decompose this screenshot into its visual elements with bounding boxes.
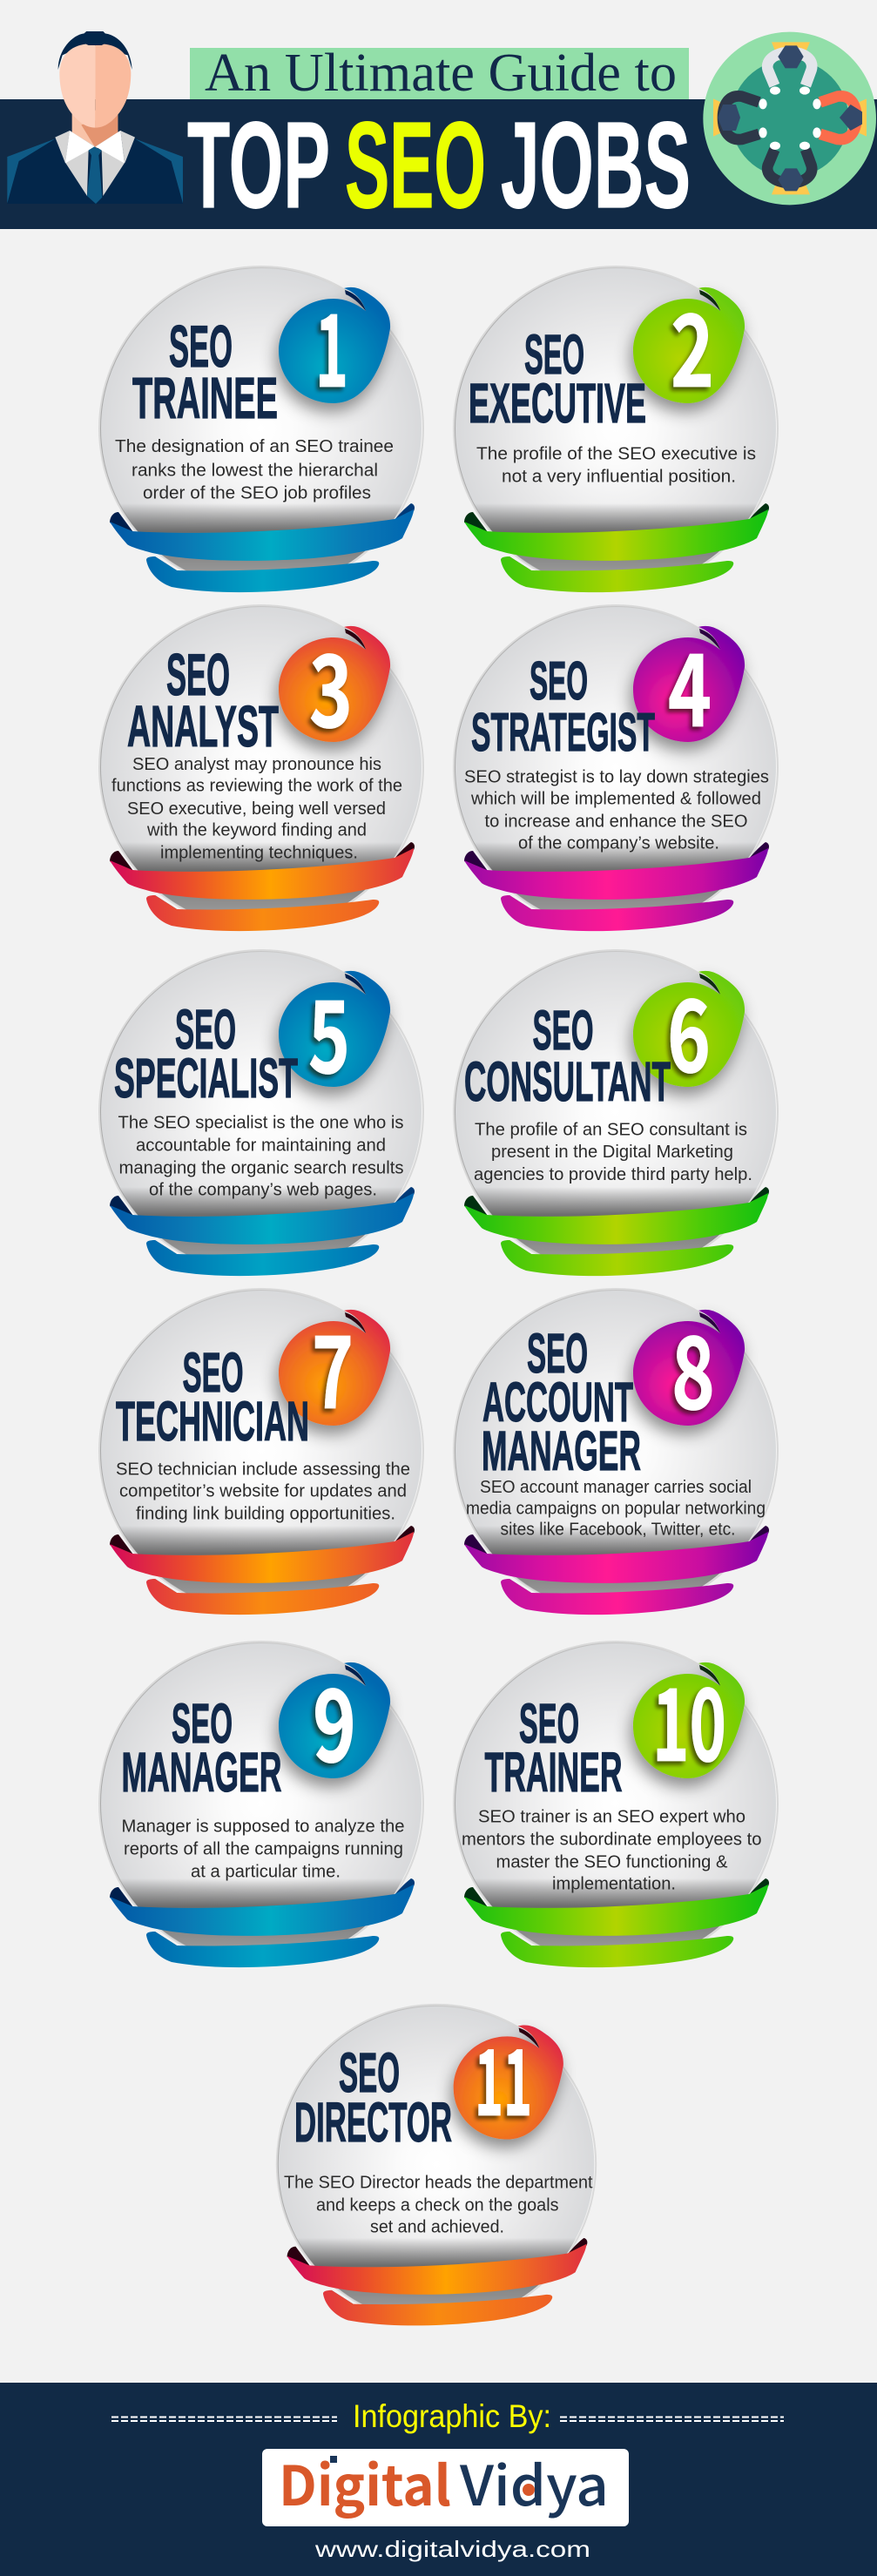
heading: ANALYST xyxy=(127,694,279,759)
panel: SEO Manager xyxy=(98,1641,424,1967)
heading xyxy=(116,1341,309,1453)
description: managing the organic search results xyxy=(118,1158,404,1177)
sphere and ribbon xyxy=(276,2004,597,2325)
description: ranks the lowest the hierarchal xyxy=(132,460,378,481)
heading xyxy=(132,314,278,431)
description xyxy=(284,2172,593,2236)
panel: SEO Specialist xyxy=(98,949,424,1276)
heading xyxy=(127,642,279,759)
description xyxy=(118,1113,404,1200)
description: which will be implemented & followed xyxy=(470,789,761,808)
description: functions as reviewing the work of the xyxy=(111,775,402,796)
number: 4 xyxy=(668,611,712,756)
heading: ACCOUNT xyxy=(482,1371,633,1433)
description: The profile of an SEO consultant is xyxy=(475,1120,747,1139)
description: agencies to provide third party help. xyxy=(474,1164,752,1184)
panel: SEO Consultant xyxy=(453,949,779,1276)
sphere and ribbon xyxy=(98,266,424,592)
description xyxy=(122,1817,404,1881)
sphere and ribbon xyxy=(98,604,424,931)
footer band xyxy=(0,2383,877,2576)
sphere and ribbon xyxy=(98,1288,424,1615)
heading xyxy=(114,998,298,1109)
description: order of the SEO job profiles xyxy=(143,482,371,503)
heading xyxy=(294,2041,452,2154)
logo: Digital Vidya: Vidya xyxy=(459,2443,609,2522)
description: SEO executive, being well versed xyxy=(127,799,386,819)
heading: STRATEGIST xyxy=(471,703,655,763)
heading xyxy=(484,1692,622,1804)
description: SEO analyst may pronounce his xyxy=(132,754,381,774)
number: 2 xyxy=(671,272,714,416)
logo: Digital Vidya: Digital xyxy=(279,2443,451,2522)
website url: www.digitalvidya.com xyxy=(314,2536,590,2562)
description: Manager is supposed to analyze the xyxy=(122,1817,404,1836)
description: set and achieved. xyxy=(370,2217,504,2236)
footer heading: Infographic By: Infographic By: xyxy=(353,2398,551,2434)
heading: SEO xyxy=(524,323,584,386)
sphere and ribbon xyxy=(453,604,779,931)
heading: DIRECTOR xyxy=(294,2091,452,2154)
heading: SEO xyxy=(339,2041,400,2104)
heading: SEO xyxy=(519,1692,579,1755)
heading xyxy=(464,999,671,1113)
heading: SEO xyxy=(166,642,230,708)
description: sites like Facebook, Twitter, etc. xyxy=(500,1519,735,1540)
main title: TOP SEO JOBS: JOBS xyxy=(501,96,691,233)
heading: TECHNICIAN xyxy=(116,1390,309,1453)
panel: SEO Trainee xyxy=(98,266,424,592)
description: media campaigns on popular networking xyxy=(466,1498,766,1519)
heading xyxy=(122,1692,282,1804)
heading xyxy=(471,651,655,763)
description xyxy=(115,436,394,503)
heading: SEO xyxy=(530,651,588,711)
sphere and ribbon xyxy=(98,1641,424,1967)
description: The profile of the SEO executive is xyxy=(476,444,756,463)
heading: CONSULTANT xyxy=(464,1050,671,1113)
description: SEO technician include assessing the xyxy=(116,1460,410,1479)
description xyxy=(476,444,756,486)
description: at a particular time. xyxy=(191,1862,341,1881)
heading: TRAINER xyxy=(484,1741,622,1804)
description: competitor’s website for updates and xyxy=(119,1480,407,1501)
icon: businessman xyxy=(7,31,183,204)
description: implementing techniques. xyxy=(160,843,358,862)
number: 1 xyxy=(315,272,348,416)
description: with the keyword finding and xyxy=(146,820,367,840)
footer dashes xyxy=(111,2418,784,2421)
title strip: An Ultimate Guide to: An Ultimate Guide to xyxy=(205,44,677,103)
panel: SEO Analyst xyxy=(98,604,424,931)
description: SEO trainer is an SEO expert who xyxy=(478,1806,745,1827)
heading: SPECIALIST xyxy=(114,1047,298,1109)
heading xyxy=(482,1322,641,1482)
description: of the company’s web pages. xyxy=(149,1179,377,1200)
number: 10 xyxy=(652,1646,726,1790)
description: SEO account manager carries social xyxy=(480,1477,752,1497)
number: 6 xyxy=(667,957,711,1102)
description: The designation of an SEO trainee xyxy=(115,436,394,456)
description: mentors the subordinate employees to xyxy=(462,1829,761,1850)
main title: TOP SEO JOBS: SEO xyxy=(345,96,486,233)
description: of the company’s website. xyxy=(518,833,719,853)
sphere and ribbon xyxy=(453,1288,779,1615)
sphere and ribbon xyxy=(453,1641,779,1967)
panel: SEO Trainer xyxy=(453,1641,779,1967)
icon: team around table xyxy=(703,32,876,205)
heading: TRAINEE xyxy=(132,366,278,431)
heading: SEO xyxy=(175,998,236,1061)
heading: SEO xyxy=(172,1692,233,1755)
panel: SEO Strategist xyxy=(453,604,779,931)
description: accountable for maintaining and xyxy=(136,1136,386,1155)
description: implementation. xyxy=(552,1874,676,1893)
panel: SEO Technician xyxy=(98,1288,424,1615)
heading xyxy=(469,323,646,435)
number: 9 xyxy=(313,1647,356,1791)
number: 7 xyxy=(312,1293,354,1438)
heading: SEO xyxy=(183,1341,244,1404)
description xyxy=(116,1460,410,1524)
panel: SEO Executive xyxy=(453,266,779,592)
logo: Digital Vidya xyxy=(262,2443,629,2526)
heading: EXECUTIVE xyxy=(469,372,646,435)
description xyxy=(464,766,769,853)
number: 11 xyxy=(475,2010,532,2142)
sphere and ribbon xyxy=(453,949,779,1276)
number: 5 xyxy=(308,958,350,1103)
description: reports of all the campaigns running xyxy=(124,1839,403,1858)
main title: TOP SEO JOBS xyxy=(187,96,691,233)
description: present in the Digital Marketing xyxy=(491,1142,733,1162)
description xyxy=(474,1120,752,1184)
heading: SEO xyxy=(527,1322,588,1385)
description: not a very influential position. xyxy=(502,467,736,486)
panel: SEO Director xyxy=(276,2004,597,2325)
description: master the SEO functioning & xyxy=(496,1851,728,1872)
sphere and ribbon xyxy=(453,266,779,592)
panel: SEO Account Manager xyxy=(453,1288,779,1615)
main title: TOP SEO JOBS: TOP xyxy=(187,96,330,233)
number: 8 xyxy=(671,1294,715,1439)
description: The SEO specialist is the one who is xyxy=(118,1113,404,1132)
description: and keeps a check on the goals xyxy=(316,2195,559,2215)
description: to increase and enhance the SEO xyxy=(484,812,747,831)
description: finding link building opportunities. xyxy=(136,1503,395,1524)
header band xyxy=(0,99,877,229)
description: The SEO Director heads the department xyxy=(284,2172,593,2193)
heading: MANAGER xyxy=(482,1419,641,1482)
description xyxy=(111,754,402,862)
sphere and ribbon xyxy=(98,949,424,1276)
description xyxy=(466,1477,766,1540)
heading: SEO xyxy=(533,999,594,1062)
heading: SEO xyxy=(169,314,233,380)
description xyxy=(462,1806,761,1893)
heading: MANAGER xyxy=(122,1741,282,1804)
description: SEO strategist is to lay down strategies xyxy=(464,766,769,787)
number: 3 xyxy=(309,612,353,757)
